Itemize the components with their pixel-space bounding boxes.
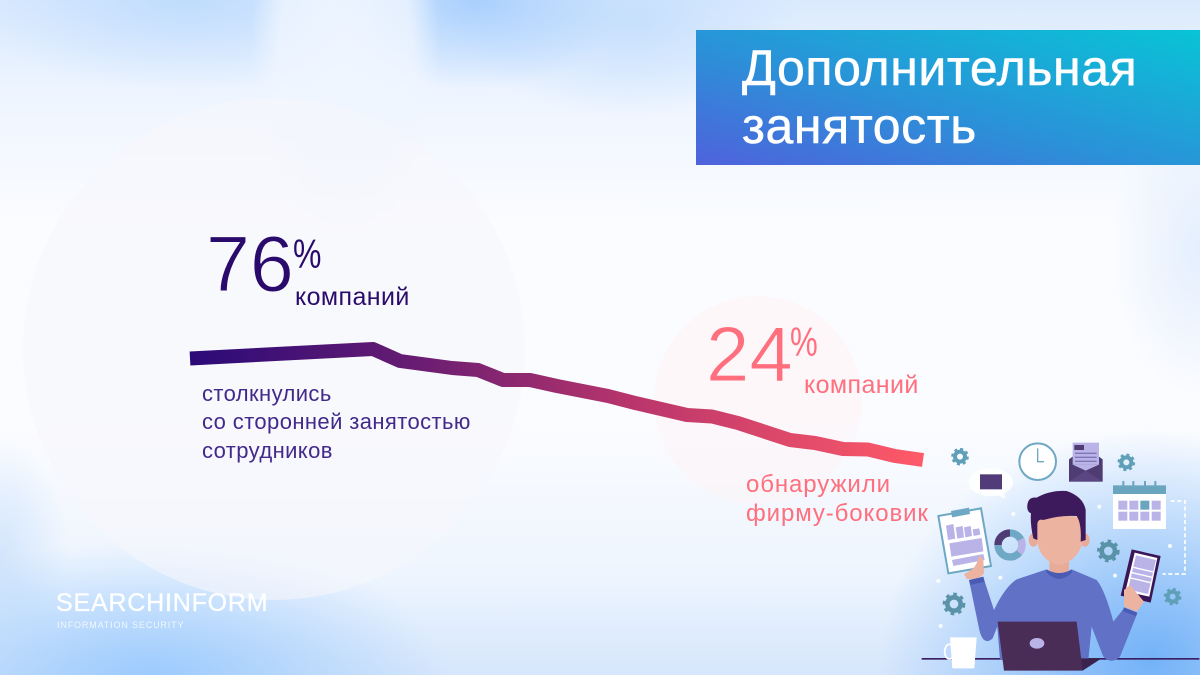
heading text: занятость <box>742 98 977 154</box>
icon: phone <box>1121 549 1161 603</box>
icon: calendar <box>1113 481 1166 529</box>
text: description left: столкнулись <box>202 381 332 406</box>
text: description right: фирму-боковик <box>746 500 929 527</box>
logo tagline: INFORMATION SECURITY <box>57 620 184 630</box>
panel: small translucent pink circle <box>654 296 862 504</box>
text: description left: со сторонней занятостью <box>202 409 471 434</box>
text: description left: сотрудников <box>202 438 333 463</box>
logo wordmark: SEARCHINFORM <box>56 589 268 617</box>
caption: компаний <box>804 371 919 399</box>
icon: gear top right <box>1119 455 1134 470</box>
cuffs <box>969 577 1137 616</box>
torso and arms <box>969 569 1137 661</box>
face <box>1037 516 1082 565</box>
icon: gear bottom left <box>944 594 964 614</box>
laptop logo <box>1030 638 1044 649</box>
percent sign: % <box>790 319 818 365</box>
icon: gear middle right <box>1098 541 1118 561</box>
number 24: 24 <box>706 310 793 398</box>
icon: envelope with letter <box>1069 443 1103 482</box>
illustration: person multitasking <box>922 442 1200 671</box>
heading text <box>742 40 1137 154</box>
title banner <box>696 30 1200 165</box>
ears <box>1029 533 1090 547</box>
icon: message bubble <box>968 468 1013 499</box>
text: description right <box>746 471 929 527</box>
text: description right: обнаружили <box>746 471 891 498</box>
stat: 24 percent <box>706 310 919 399</box>
icon: gear top left <box>952 449 968 464</box>
panel: large translucent circle <box>23 98 525 600</box>
percent sign: % <box>293 231 321 277</box>
left hand <box>964 555 984 579</box>
collar <box>1047 569 1072 579</box>
icon: clipboard <box>938 508 991 573</box>
icon: donut chart <box>998 533 1022 557</box>
stat: 76 percent <box>206 219 410 311</box>
icon: mug <box>945 637 977 668</box>
caption: компаний <box>295 283 410 311</box>
person <box>969 491 1137 661</box>
table line <box>922 658 1199 660</box>
number 76: 76 <box>206 219 294 308</box>
hair <box>1027 491 1086 542</box>
heading text: Дополнительная <box>742 40 1137 96</box>
right hand <box>1124 585 1144 612</box>
decorative dots and dashes <box>936 505 1172 628</box>
icon: laptop <box>998 622 1102 671</box>
icon: gear bottom right <box>1165 589 1180 604</box>
text: description left <box>202 381 471 463</box>
icon: clock <box>1019 443 1056 480</box>
logo <box>56 589 268 630</box>
neck <box>1049 558 1069 574</box>
